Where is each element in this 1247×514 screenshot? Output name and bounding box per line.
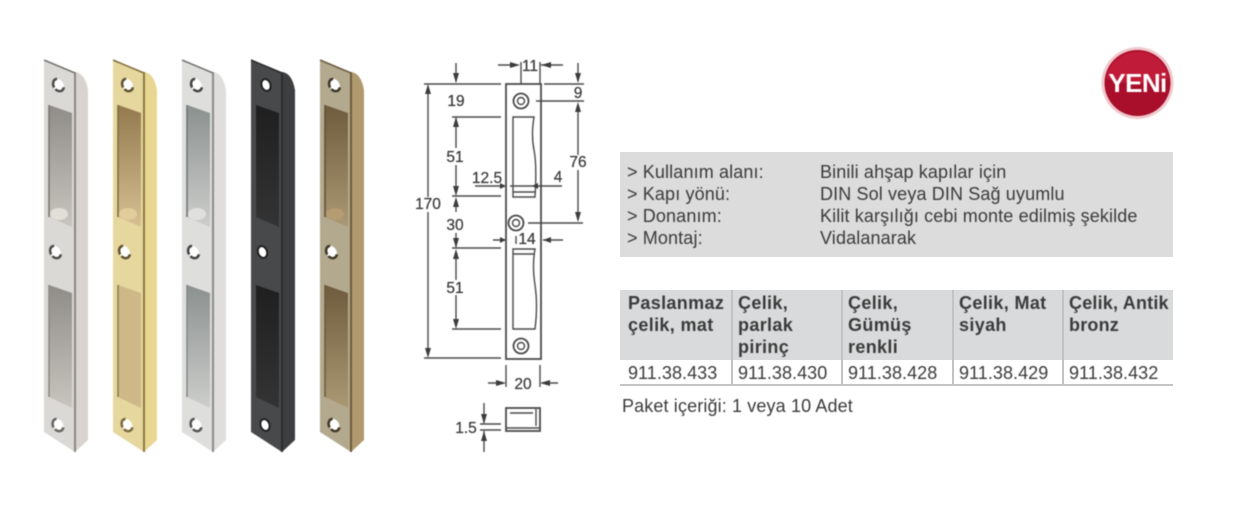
- column: stainless steel: Paslanmaz: [628, 293, 724, 313]
- panel: product properties: [620, 152, 1173, 257]
- badge: YENİ: YENi: [1108, 68, 1167, 98]
- plate: steel silver: [182, 60, 226, 452]
- dimension labels: 51: [446, 149, 464, 166]
- dimension labels: [415, 58, 587, 437]
- property values: [820, 162, 1138, 248]
- article numbers: [628, 363, 1158, 383]
- table header background: [620, 290, 1173, 360]
- property values: DIN Sol veya DIN Sağ uyumlu: [820, 184, 1065, 204]
- table: finishes and article numbers: [620, 290, 1173, 386]
- column: brass: pirinç: [738, 337, 789, 357]
- property values: Binili ahşap kapılar için: [820, 162, 1006, 182]
- dimension labels: 170: [415, 196, 441, 213]
- article numbers: 911.38.433: [628, 363, 717, 383]
- dimension labels: 19: [447, 93, 465, 110]
- plate: antique bronze: [320, 60, 364, 452]
- property labels: [627, 162, 764, 249]
- column separators: [731, 290, 1064, 384]
- property labels: > Montaj:: [627, 228, 703, 248]
- product photos: five strike plates: [43, 58, 365, 453]
- package contents note: Paket içeriği: 1 veya 10 Adet: [622, 396, 853, 416]
- article numbers: 911.38.430: [738, 363, 827, 383]
- property values: Kilit karşılığı cebi monte edilmiş şekilde: [820, 206, 1138, 226]
- column: black: [959, 293, 1047, 336]
- dimension labels: 11: [522, 58, 538, 75]
- dimension labels: 4: [554, 169, 563, 186]
- column: bronze: Çelik, Antik: [1069, 293, 1169, 313]
- article numbers: 911.38.428: [848, 363, 937, 383]
- dimension labels: 14: [518, 231, 536, 248]
- column: brass: parlak: [738, 315, 793, 335]
- article numbers: 911.38.429: [959, 363, 1048, 383]
- dimension labels: 20: [514, 376, 532, 393]
- column: silver: Çelik,: [848, 293, 898, 313]
- property labels: > Donanım:: [627, 206, 722, 226]
- plate outline: [506, 84, 541, 359]
- table bottom rule: [620, 384, 1173, 386]
- dimension labels: 76: [569, 154, 587, 171]
- property values: Vidalanarak: [820, 228, 916, 248]
- column: silver: Gümüş: [848, 315, 912, 335]
- property labels: > Kapı yönü:: [627, 184, 730, 204]
- column: bronze: bronz: [1069, 315, 1119, 335]
- column: brass: [738, 293, 794, 358]
- column: silver: renkli: [848, 337, 898, 357]
- dimension labels: 9: [574, 85, 582, 102]
- dimension labels: 1.5: [455, 420, 477, 437]
- column: bronze: [1069, 293, 1169, 335]
- column: stainless steel: çelik, mat: [628, 315, 714, 335]
- article numbers: 911.38.432: [1069, 363, 1158, 383]
- property labels: > Kullanım alanı:: [627, 162, 764, 182]
- dimension labels: 30: [446, 217, 464, 234]
- column: black: Çelik, Mat: [959, 293, 1047, 313]
- plate: matte black: [251, 60, 295, 452]
- column: brass: Çelik,: [738, 293, 788, 313]
- dimension labels: 51: [446, 280, 464, 297]
- plate: polished brass: [113, 60, 157, 452]
- column: silver: [848, 293, 912, 357]
- column: stainless steel: [628, 293, 724, 336]
- column: black: siyah: [959, 315, 1007, 335]
- dimension labels: 12.5: [472, 170, 502, 187]
- plate: stainless steel matte: [44, 60, 88, 452]
